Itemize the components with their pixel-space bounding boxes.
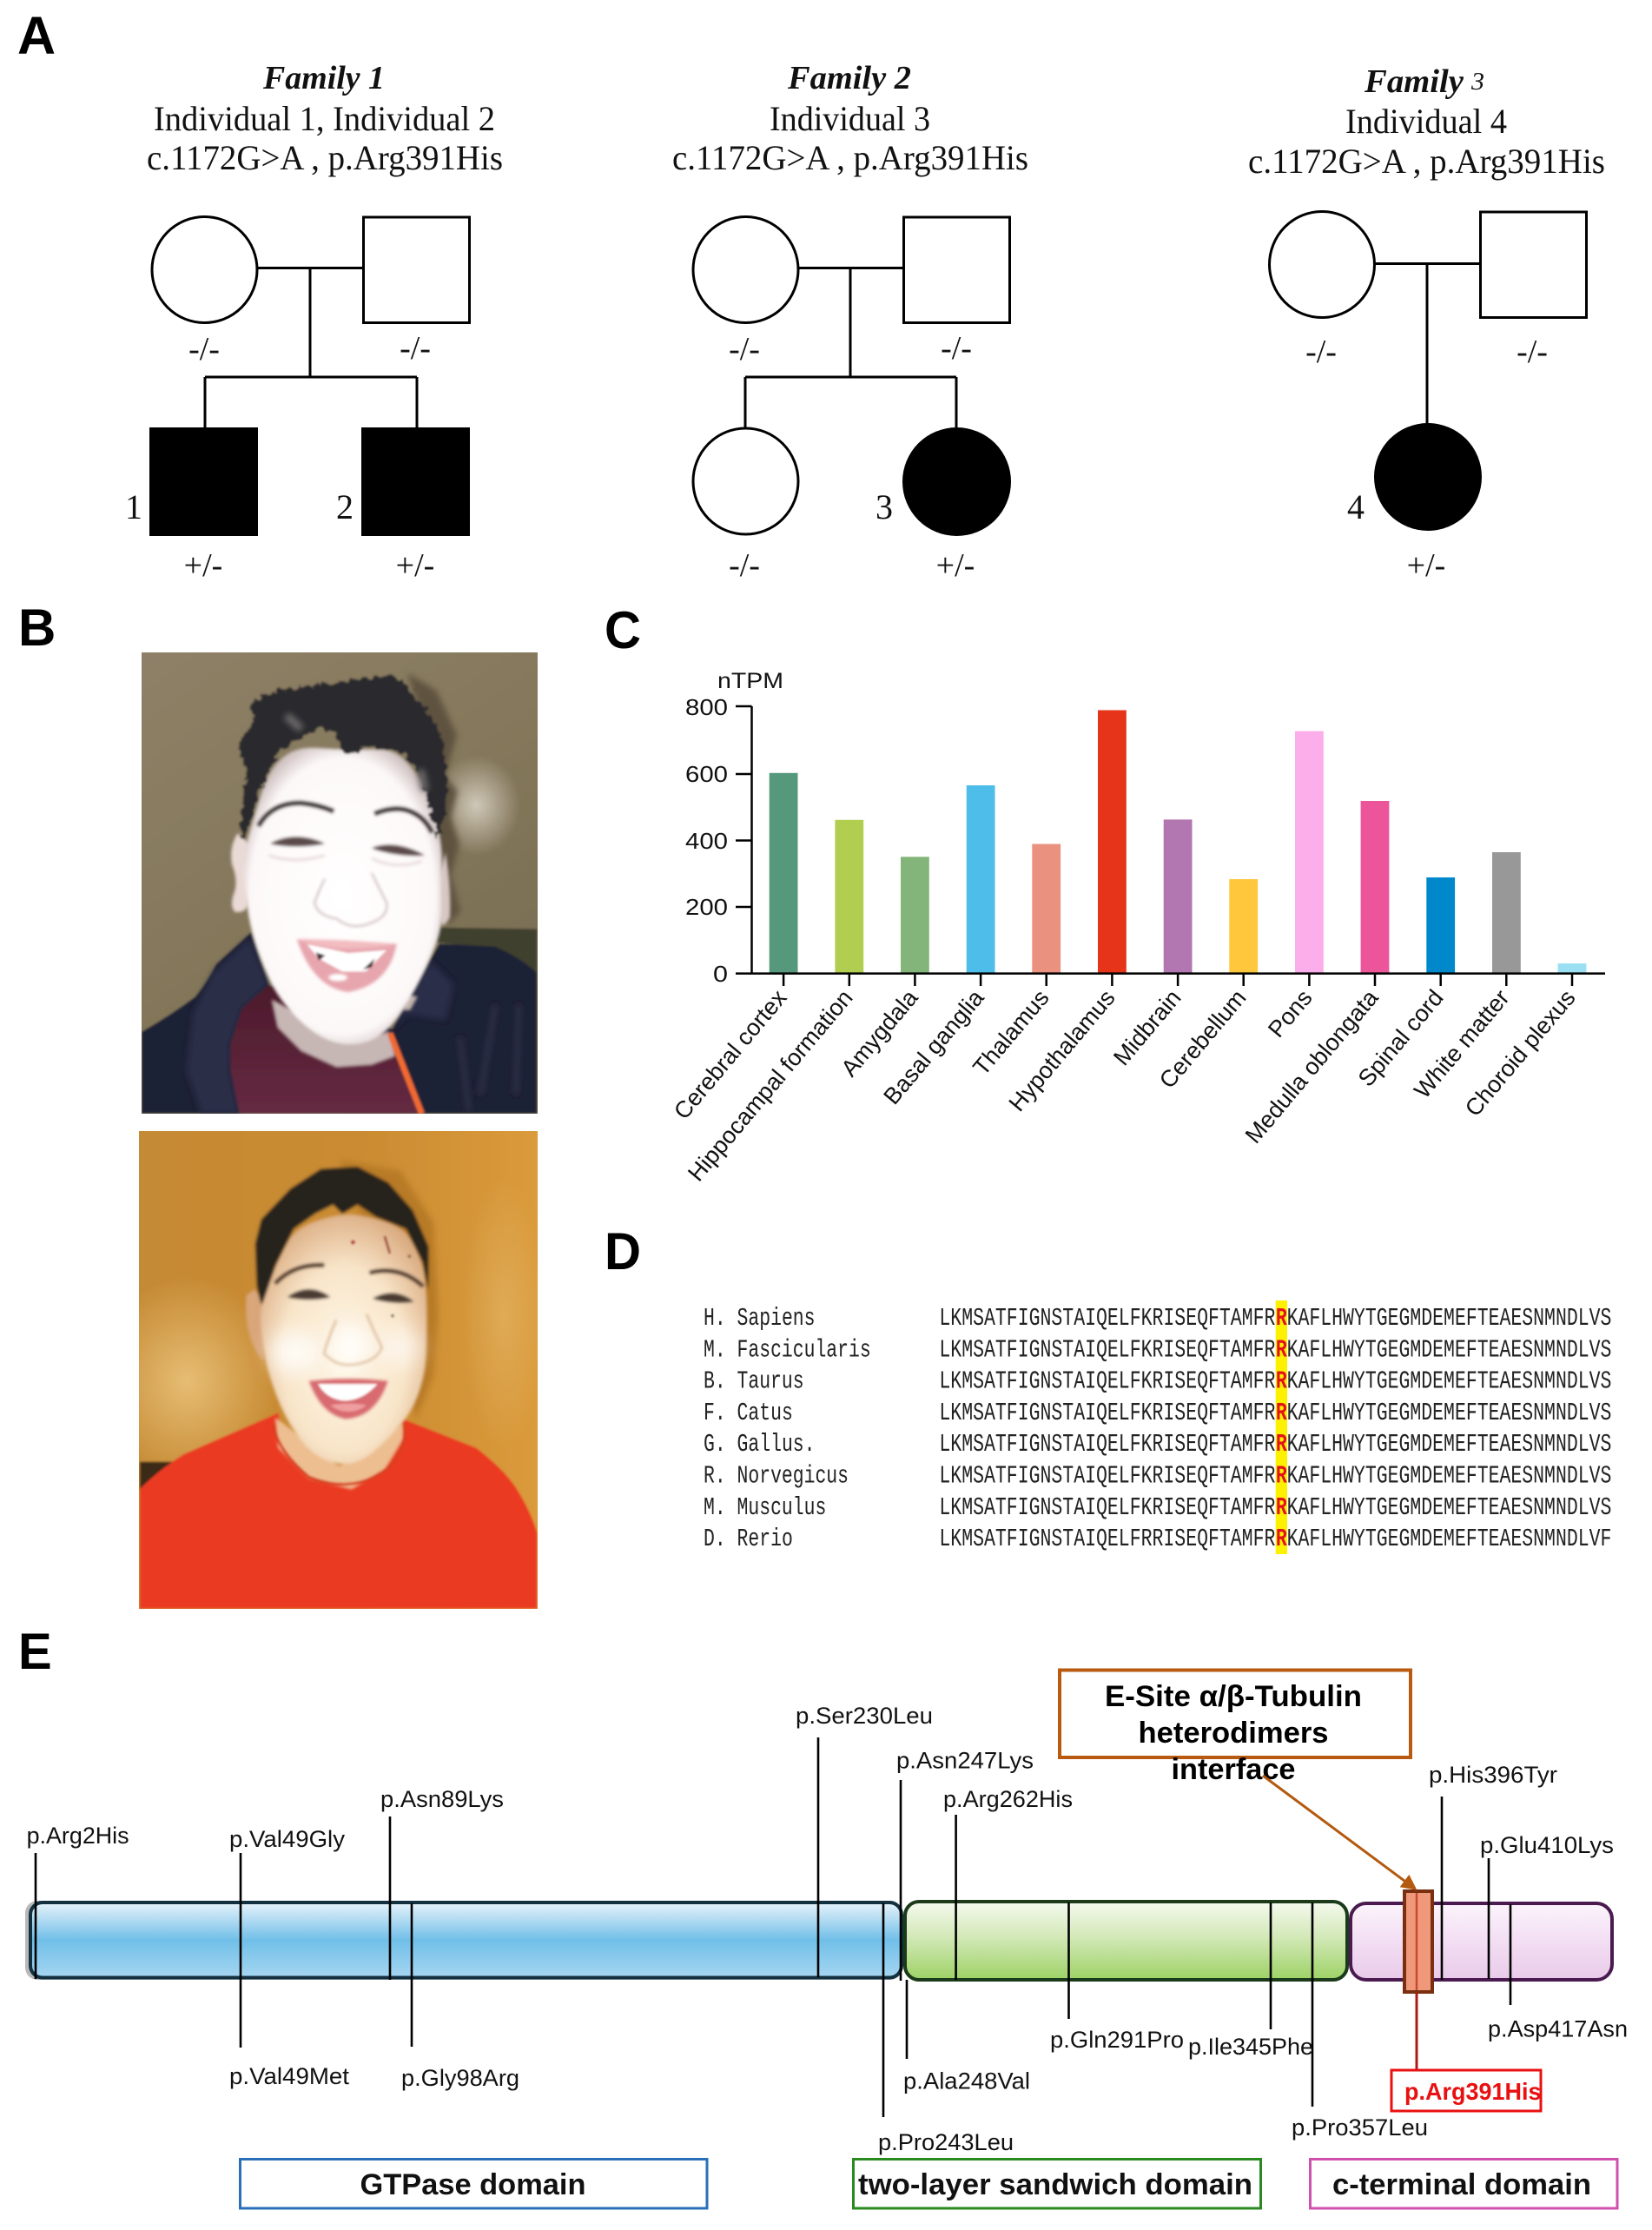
genotype labels family 1: -/-	[400, 330, 431, 367]
callout: E-site interface	[1060, 1670, 1411, 1786]
callout: E-site interface: interface	[1171, 1753, 1296, 1786]
pedigree tree family 2	[693, 217, 1011, 536]
panel label E: E	[18, 1624, 52, 1680]
domain bar: GTPase	[30, 1902, 902, 1977]
mutation labels: p.Ala248Val	[903, 2068, 1030, 2094]
mutation labels: p.Asn247Lys	[896, 1748, 1034, 1774]
genotype labels family 3: -/-	[1517, 334, 1548, 370]
x axis category labels: Cerebellum	[1154, 985, 1252, 1094]
callout: E-site interface: heterodimers	[1138, 1717, 1329, 1750]
callout: p.Arg391His	[1391, 1993, 1541, 2111]
domain bar: c-terminal	[1351, 1903, 1612, 1980]
domain label: two-layer sandwich: two-layer sandwich domain	[858, 2168, 1252, 2201]
y axis tick labels: 0	[713, 961, 728, 987]
axes and ticks	[736, 706, 1605, 986]
x axis category labels: Hypothalamus	[1004, 985, 1120, 1116]
bars	[770, 711, 1586, 974]
y axis title: nTPM	[717, 669, 783, 693]
mutation labels: p.Arg262His	[943, 1786, 1073, 1812]
highlight column	[1276, 1300, 1287, 1554]
heading: family 3: Family	[1364, 63, 1464, 100]
panel label A: A	[17, 6, 56, 65]
x axis category labels: Thalamus	[968, 985, 1054, 1081]
x axis category labels: Pons	[1263, 985, 1318, 1042]
aligned sequences: LKMSATFIGNSTAIQELFRRISEQFTAMFR	[939, 1525, 1275, 1553]
mutation labels: p.Arg2His	[27, 1823, 129, 1849]
arrow: interface to marker	[1263, 1776, 1415, 1889]
heading: family 1: Family 1	[262, 60, 385, 96]
panel: protein domain map	[25, 1670, 1628, 2208]
domain label: GTPase: GTPase domain	[360, 2168, 585, 2201]
heading: family 3	[1248, 63, 1605, 181]
heading: family 1: c.1172G>A , p.Arg391His	[147, 138, 503, 177]
species names: B. Taurus	[704, 1367, 804, 1396]
mutation labels: p.Ser230Leu	[796, 1703, 933, 1729]
genotype labels family 2	[729, 330, 975, 584]
aligned sequences: LKMSATFIGNSTAIQELFKRISEQFTAMFR	[939, 1304, 1275, 1333]
aligned sequences: LKMSATFIGNSTAIQELFKRISEQFTAMFR	[939, 1461, 1275, 1491]
species names: F. Catus	[704, 1399, 793, 1427]
conserved residue R: R	[1276, 1493, 1287, 1522]
heading: family 3: 3	[1470, 69, 1484, 96]
heading: family 2: c.1172G>A , p.Arg391His	[672, 138, 1028, 177]
panel label B: B	[18, 599, 56, 657]
x axis category labels: Medulla oblongata	[1240, 984, 1384, 1148]
x axis category labels: Hippocampal formation	[683, 985, 858, 1187]
y axis tick labels	[685, 694, 728, 987]
mutation lines	[36, 1737, 1510, 2117]
heading: family 3: Individual 4	[1345, 102, 1507, 141]
bar chart: nTPM by brain region	[669, 669, 1605, 1187]
y axis tick labels: 800	[685, 694, 728, 720]
genotype labels family 1: 1	[125, 487, 142, 526]
panel: sequence alignment	[704, 1300, 1611, 1554]
mutation labels: p.Val49Gly	[229, 1826, 346, 1852]
x axis category labels: Midbrain	[1108, 985, 1186, 1070]
mutation labels: p.Gln291Pro	[1050, 2027, 1184, 2053]
genotype labels family 1: +/-	[396, 547, 434, 584]
x axis category labels: Amygdala	[836, 984, 923, 1082]
E-site marker box	[1404, 1891, 1432, 1992]
callout: E-site interface: E-Site α/β-Tubulin	[1105, 1680, 1362, 1713]
genotype labels family 2: +/-	[936, 547, 975, 584]
aligned sequences: LKMSATFIGNSTAIQELFKRISEQFTAMFR	[939, 1399, 1275, 1427]
heading: family 1: Individual 1, Individual 2	[154, 99, 495, 138]
conserved residue R	[1276, 1304, 1287, 1553]
domain label: c-terminal	[1310, 2160, 1617, 2208]
x axis category labels	[669, 984, 1581, 1187]
x axis category labels: Basal ganglia	[878, 984, 989, 1109]
heading: family 2	[672, 60, 1028, 177]
genotype labels family 3	[1305, 334, 1548, 584]
species names: D. Rerio	[704, 1525, 793, 1553]
heading: family 1	[147, 60, 503, 177]
genotype labels family 3: +/-	[1407, 547, 1445, 584]
species names	[704, 1304, 871, 1553]
photo: patient wearing red shirt	[139, 1131, 538, 1609]
y axis tick labels: 600	[685, 761, 728, 787]
mutation labels: p.Ile345Phe	[1188, 2034, 1313, 2060]
conserved residue R: R	[1276, 1304, 1287, 1333]
mutation labels	[27, 1703, 1628, 2155]
pedigree tree family 1	[149, 217, 470, 536]
aligned sequences	[939, 1304, 1611, 1553]
panel label C: C	[605, 601, 641, 659]
genotype labels family 1: +/-	[184, 547, 222, 584]
aligned sequences: LKMSATFIGNSTAIQELFKRISEQFTAMFR	[939, 1493, 1275, 1522]
mutation labels: p.Gly98Arg	[401, 2065, 519, 2091]
genotype labels family 2: 3	[876, 487, 893, 526]
aligned sequences: LKMSATFIGNSTAIQELFKRISEQFTAMFR	[939, 1335, 1275, 1364]
y axis tick labels: 200	[685, 894, 728, 920]
species names: M. Fascicularis	[704, 1335, 871, 1364]
genotype labels family 2: -/-	[729, 547, 760, 584]
genotype labels family 3: 4	[1347, 487, 1365, 526]
conserved residue R: R	[1276, 1335, 1287, 1364]
conserved residue R: R	[1276, 1367, 1287, 1396]
x axis category labels: Cerebral cortex	[669, 984, 792, 1124]
aligned sequences: LKMSATFIGNSTAIQELFKRISEQFTAMFR	[939, 1430, 1275, 1459]
panel: pedigree family 3	[1248, 63, 1605, 584]
conserved residue R: R	[1276, 1399, 1287, 1427]
genotype labels family 1	[125, 330, 434, 584]
species names: G. Gallus.	[704, 1430, 815, 1459]
panel: pedigree family 2	[672, 60, 1028, 584]
domain label: c-terminal: c-terminal domain	[1332, 2168, 1591, 2201]
genotype labels family 3: -/-	[1305, 334, 1337, 370]
x axis category labels: White matter	[1409, 985, 1515, 1103]
conserved residue R: R	[1276, 1461, 1287, 1491]
species names: R. Norvegicus	[704, 1461, 849, 1491]
panel: pedigree family 1	[125, 60, 503, 584]
species names: M. Musculus	[704, 1493, 826, 1522]
heading: family 2: Individual 3	[770, 99, 930, 138]
conserved residue R: R	[1276, 1430, 1287, 1459]
domain label: GTPase	[240, 2160, 707, 2208]
mutation labels: p.His396Tyr	[1429, 1762, 1557, 1788]
mutation labels: p.Glu410Lys	[1480, 1832, 1614, 1858]
heading: family 3: c.1172G>A , p.Arg391His	[1248, 142, 1605, 181]
domain bar: two-layer sandwich	[905, 1902, 1347, 1980]
genotype labels family 1: -/-	[188, 331, 220, 367]
heading: family 2: Family 2	[787, 60, 911, 96]
mutation labels: p.Asn89Lys	[380, 1786, 504, 1812]
x axis category labels: Spinal cord	[1353, 985, 1449, 1091]
aligned sequences: LKMSATFIGNSTAIQELFKRISEQFTAMFR	[939, 1367, 1275, 1396]
genotype labels family 1: 2	[336, 487, 354, 526]
mutation labels: p.Pro243Leu	[878, 2129, 1014, 2155]
panel label D: D	[605, 1222, 641, 1280]
photo: patient wearing dark jacket	[130, 644, 548, 1126]
callout: p.Arg391His: p.Arg391His	[1404, 2078, 1541, 2105]
mutation labels: p.Val49Met	[229, 2063, 350, 2089]
genotype labels family 2: -/-	[729, 331, 760, 367]
mutation labels: p.Asp417Asn	[1488, 2015, 1628, 2041]
y axis tick labels: 400	[685, 828, 728, 854]
bar shadow	[25, 1901, 902, 1980]
mutation labels: p.Pro357Leu	[1292, 2114, 1428, 2141]
genotype labels family 2: -/-	[941, 330, 972, 367]
domain label: two-layer sandwich	[853, 2160, 1261, 2208]
species names: H. Sapiens	[704, 1304, 815, 1333]
x axis category labels: Choroid plexus	[1460, 985, 1581, 1122]
conserved residue R: R	[1276, 1525, 1287, 1553]
pedigree tree family 3	[1270, 212, 1586, 531]
